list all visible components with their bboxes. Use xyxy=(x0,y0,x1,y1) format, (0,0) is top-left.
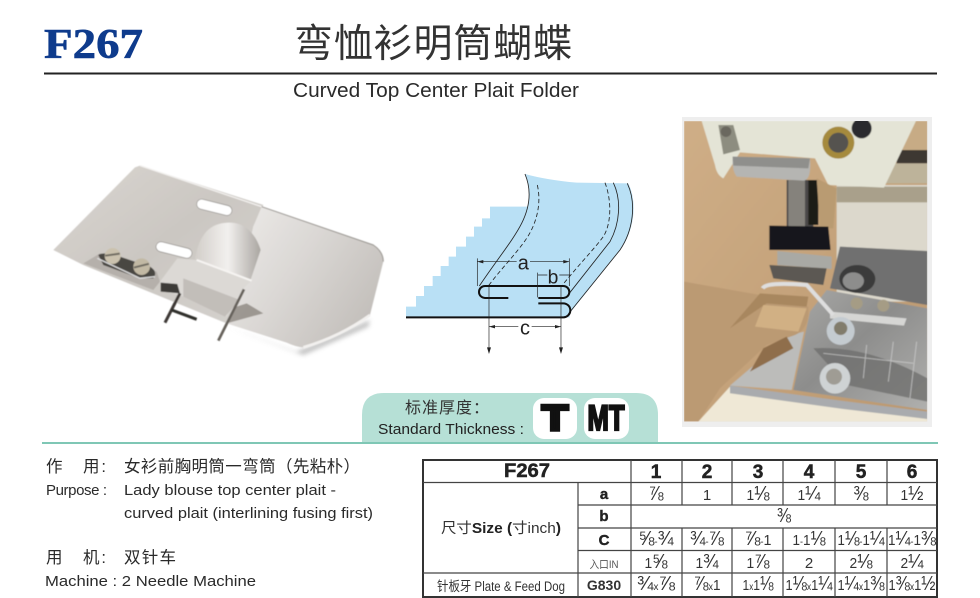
shadow under folder xyxy=(227,303,263,323)
row a values: 1½ xyxy=(900,483,924,505)
needles xyxy=(165,293,180,323)
screws xyxy=(105,248,121,264)
needle plate xyxy=(830,247,927,305)
row feed dog values: 1⅜x1½ xyxy=(888,573,936,595)
purpose text block: curved plait (interlining fusing first) xyxy=(124,505,373,522)
purpose text block: 女衫前胸明筒一弯筒（先粘朴） xyxy=(124,457,360,476)
machine text block: 用 机: xyxy=(46,548,106,567)
row labels: G830 xyxy=(587,577,621,593)
row inlet values: 1¾ xyxy=(696,551,719,573)
left plate xyxy=(53,166,263,323)
table grid xyxy=(423,460,937,597)
row labels: b xyxy=(599,508,609,525)
foot block xyxy=(769,226,831,250)
table header: 6 xyxy=(907,462,917,483)
product photo: plait folder xyxy=(53,166,383,355)
standard thickness badge xyxy=(362,393,658,442)
row labels: a xyxy=(600,486,609,503)
dimension lines xyxy=(477,258,570,350)
purpose text block: 作 用: xyxy=(46,457,106,476)
lower plate xyxy=(793,290,927,410)
table header: 3 xyxy=(753,462,763,483)
row c values xyxy=(638,528,936,550)
table header xyxy=(504,461,917,483)
row feed dog values xyxy=(637,573,936,595)
row feed dog values: 1⅛x1¼ xyxy=(786,573,833,595)
row c values: 1-1⅛ xyxy=(792,528,826,550)
fabric xyxy=(684,121,927,422)
presser bar xyxy=(787,180,813,228)
right plate xyxy=(227,207,383,347)
machine head xyxy=(702,121,916,188)
row inlet values: 1⅞ xyxy=(746,551,770,573)
thread guide xyxy=(732,157,810,181)
row a values: 1¼ xyxy=(798,483,821,505)
purpose text block: Lady blouse top center plait - xyxy=(124,482,336,499)
row inlet values: 1⅝ xyxy=(644,551,668,573)
table header: 5 xyxy=(856,462,867,483)
icon: MT: MT xyxy=(588,399,624,438)
thickness label xyxy=(378,399,524,438)
dimension letters: a xyxy=(518,252,530,274)
row c values: ¾-⅞ xyxy=(690,528,724,550)
screw bracket xyxy=(83,253,160,290)
dimension letters xyxy=(518,252,558,339)
stepped fabric xyxy=(406,207,570,317)
row a values: ⅞ xyxy=(648,483,664,505)
size table xyxy=(423,460,937,597)
row feed dog values: ¾x⅞ xyxy=(637,573,675,595)
folded fabric xyxy=(684,282,808,422)
usage photo xyxy=(682,117,932,427)
icon: T: T xyxy=(542,399,568,438)
row feed dog values: 1¼x1⅜ xyxy=(838,573,885,595)
row a values: 1⅛ xyxy=(746,483,770,505)
title rule xyxy=(44,72,937,74)
machine text block: Machine : 2 Needle Machine xyxy=(45,573,256,590)
purpose text block: Purpose : xyxy=(46,482,107,499)
table header: 1 xyxy=(651,462,662,483)
folder wire xyxy=(763,284,833,315)
dimension letters: b xyxy=(548,268,558,289)
folder guide xyxy=(160,258,252,317)
row labels: 入口IN xyxy=(590,559,619,571)
row labels xyxy=(437,486,621,594)
row inlet values: 2¼ xyxy=(900,551,924,573)
rail and silver edge xyxy=(730,386,927,419)
arrowheads xyxy=(477,260,569,354)
dimension letters: c xyxy=(520,317,530,339)
row a values: 1 xyxy=(703,487,711,504)
slots xyxy=(196,198,233,217)
folded layers xyxy=(406,286,570,317)
machine text block xyxy=(45,548,256,590)
machine background xyxy=(837,185,927,302)
row inlet values: 2 xyxy=(805,555,813,572)
model number: F267 xyxy=(44,22,143,68)
row a values: ⅜ xyxy=(854,483,869,505)
curved plait xyxy=(480,174,634,315)
row inlet values xyxy=(644,551,924,573)
row c values: ⅝-¾ xyxy=(638,528,674,550)
row feed dog values: 1x1⅛ xyxy=(742,573,774,595)
chinese title: 弯恤衫明筒蝴蝶 xyxy=(294,23,572,66)
size row label: 尺寸Size (寸inch) xyxy=(441,520,561,537)
row b value: ⅜ xyxy=(777,505,791,527)
row labels: 针板牙 Plate & Feed Dog xyxy=(437,579,565,594)
table header: 4 xyxy=(804,462,815,483)
photo frame shadow xyxy=(682,117,932,427)
thickness label: 标准厚度： xyxy=(405,399,489,417)
table header: 2 xyxy=(702,462,712,483)
english title: Curved Top Center Plait Folder xyxy=(293,80,579,102)
purpose text block xyxy=(46,457,373,522)
green divider xyxy=(42,442,938,444)
row labels: C xyxy=(599,532,610,549)
icon: T xyxy=(533,398,577,439)
row a values xyxy=(648,483,924,505)
row inlet values: 2⅛ xyxy=(850,551,873,573)
row c values: 1¼-1⅜ xyxy=(888,528,936,550)
machine text block: 双针车 xyxy=(124,548,176,567)
row c values: 1⅛-1¼ xyxy=(838,528,885,550)
hump xyxy=(195,223,261,282)
thickness label: Standard Thickness : xyxy=(378,422,524,438)
row feed dog values: ⅞x1 xyxy=(694,573,720,595)
stitch and fold lines xyxy=(479,174,633,314)
table header: F267 xyxy=(504,461,550,482)
row c values: ⅞-1 xyxy=(744,528,772,550)
plate shadow xyxy=(227,320,370,355)
bottom table xyxy=(698,387,927,422)
fold diagram xyxy=(406,174,634,354)
